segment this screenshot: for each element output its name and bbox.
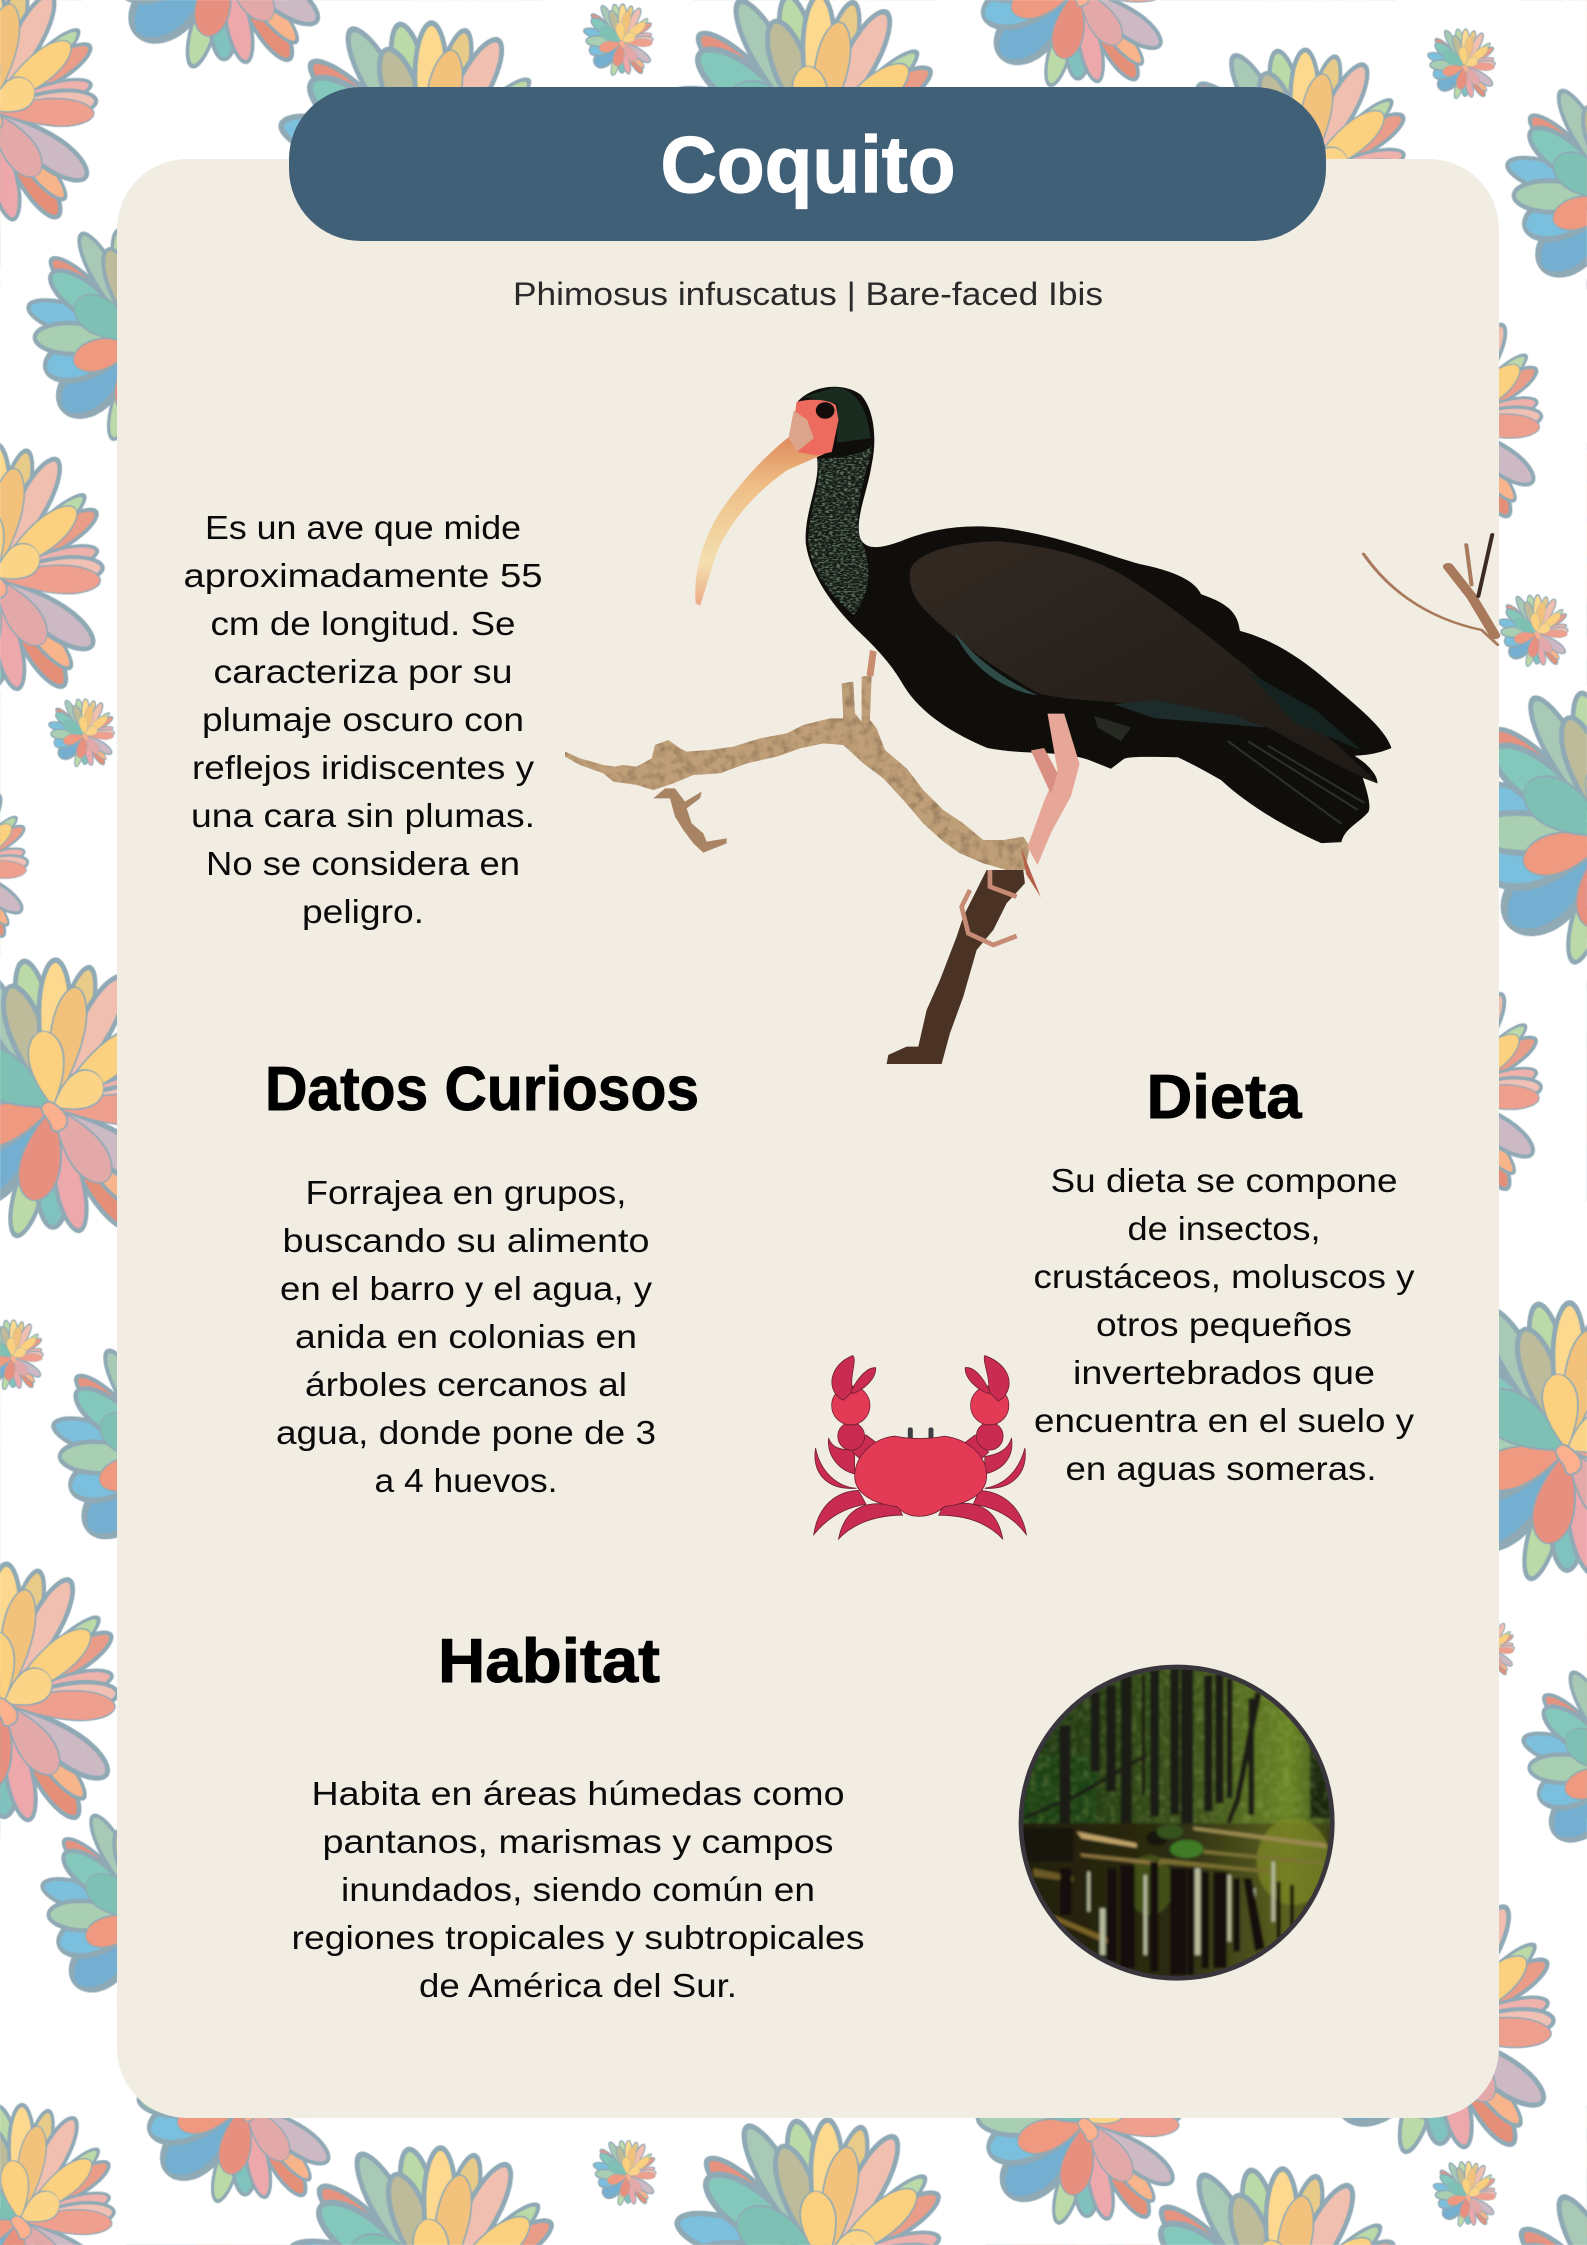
text block: datos curiosos: agua, donde pone de 3 xyxy=(276,1415,656,1452)
text block: description: una cara sin plumas. xyxy=(191,798,535,835)
text block: dieta: otros pequeños xyxy=(1096,1307,1352,1344)
body and plumage xyxy=(797,387,1391,843)
icon: crab xyxy=(814,1356,1026,1539)
subtitle: Phimosus infuscatus | Bare-faced Ibis xyxy=(513,276,1103,312)
text block: datos curiosos: Forrajea en grupos, xyxy=(306,1175,626,1212)
text block: description: aproximadamente 55 xyxy=(184,558,542,595)
photo: flooded forest xyxy=(1017,1662,1337,1983)
text block: dieta: de insectos, xyxy=(1128,1211,1320,1248)
text block: habitat: Habita en áreas húmedas como xyxy=(312,1776,844,1813)
neck sheen xyxy=(808,447,872,615)
text block: description: No se considera en xyxy=(206,846,520,883)
title banner xyxy=(289,87,1326,241)
text block: dieta: Su dieta se compone xyxy=(1050,1163,1398,1200)
text block: habitat: inundados, siendo común en xyxy=(341,1872,815,1909)
text block: description: plumaje oscuro con xyxy=(202,702,524,739)
legs xyxy=(1021,714,1080,897)
text block: datos curiosos: a 4 huevos. xyxy=(374,1463,558,1500)
illustration: ibis on a branch xyxy=(565,387,1391,1064)
face xyxy=(790,400,839,456)
heading: Habitat: Habitat xyxy=(438,1627,660,1696)
text block: habitat xyxy=(292,1776,864,2005)
text block: datos curiosos: buscando su alimento xyxy=(282,1223,650,1260)
text block: description: reflejos iridiscentes y xyxy=(192,750,534,787)
text block: description: cm de longitud. Se xyxy=(210,606,516,643)
branch xyxy=(565,650,1030,1064)
illustration: branch at right edge xyxy=(1363,534,1498,645)
text block: description: Es un ave que mide xyxy=(205,510,521,547)
panel: main card xyxy=(117,159,1499,2118)
heading: Datos Curiosos: Datos Curiosos xyxy=(265,1055,699,1124)
text block: datos curiosos: anida en colonias en xyxy=(295,1319,637,1356)
text block: description: caracteriza por su xyxy=(214,654,512,691)
beak xyxy=(695,436,824,606)
text block: datos curiosos: en el barro y el agua, y xyxy=(280,1271,652,1308)
text block: habitat: de América del Sur. xyxy=(419,1968,737,2005)
text block: description xyxy=(184,510,542,931)
text block: dieta: encuentra en el suelo y xyxy=(1034,1403,1414,1440)
text block: habitat: regiones tropicales y subtropicales xyxy=(292,1920,864,1957)
title: Coquito xyxy=(660,120,956,209)
eye xyxy=(816,402,834,419)
text block: dieta xyxy=(1034,1163,1415,1488)
text block: description: peligro. xyxy=(302,894,424,931)
text block: dieta: crustáceos, moluscos y xyxy=(1034,1259,1415,1296)
text block: datos curiosos xyxy=(276,1175,656,1500)
heading: Dieta: Dieta xyxy=(1146,1063,1302,1132)
text block: dieta: en aguas someras. xyxy=(1066,1451,1376,1488)
text block: dieta: invertebrados que xyxy=(1073,1355,1375,1392)
text block: habitat: pantanos, marismas y campos xyxy=(322,1824,834,1861)
text block: datos curiosos: árboles cercanos al xyxy=(305,1367,627,1404)
